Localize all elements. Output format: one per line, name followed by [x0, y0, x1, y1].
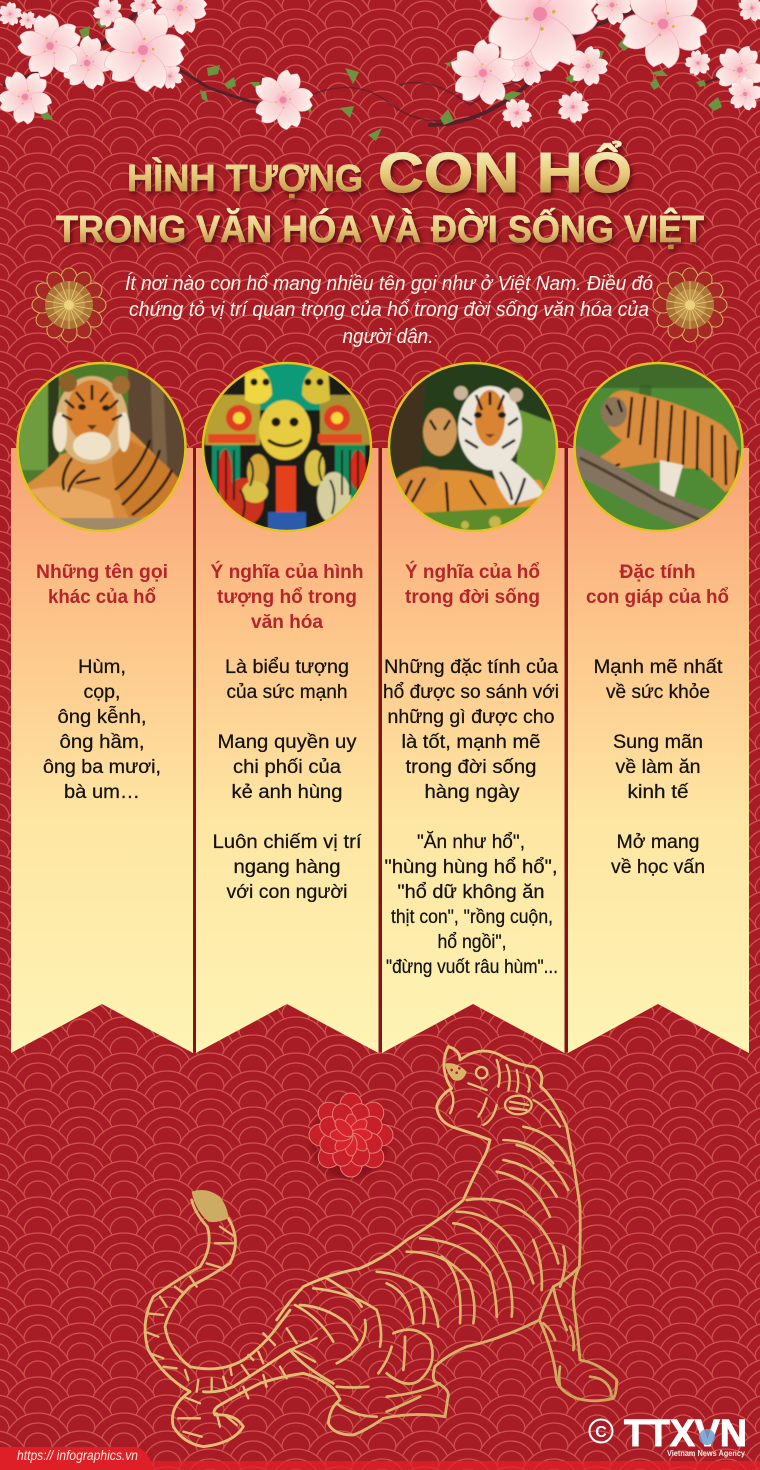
globe [699, 1429, 715, 1445]
body text: của sức mạnh [226, 681, 348, 703]
body text: Luôn chiếm vị trí [212, 831, 362, 853]
body text: hổ ngồi", [438, 931, 506, 953]
heading: trong đời sống [405, 587, 540, 608]
heading: khác của hổ [48, 587, 156, 608]
body text: ngang hàng [234, 856, 340, 878]
copyright symbol [590, 1420, 612, 1442]
body text: Mạnh mẽ nhất [594, 656, 723, 678]
intro paragraph: người dân. [342, 326, 434, 348]
body text: ông ba mươi, [43, 756, 161, 778]
heading: con giáp của hổ [586, 587, 729, 608]
body text: Những đặc tính của [384, 656, 558, 678]
body text [383, 656, 559, 978]
tiger tail and leg ticks [145, 1227, 317, 1437]
photo: tiger with cub [385, 360, 560, 535]
body text: "hùng hùng hổ hổ", [384, 856, 558, 878]
icon: right gold medallion [653, 268, 727, 342]
body text: Hùm, [78, 656, 126, 678]
body text: bà um… [64, 781, 140, 803]
body text: Sung mãn [613, 731, 703, 753]
heading [210, 561, 364, 633]
column gap lines [192, 448, 568, 1052]
panel: meaning in culture [196, 448, 378, 1053]
body text: hàng ngày [424, 781, 520, 803]
intro paragraph [125, 272, 653, 348]
body text: "hổ dữ không ăn [398, 881, 544, 903]
blossom branches: top left [0, 0, 450, 140]
body text: chi phối của [233, 756, 341, 778]
body text [594, 656, 723, 878]
icon: red flower [309, 1093, 393, 1179]
body text: với con người [226, 881, 348, 903]
intro paragraph: chứng tỏ vị trí quan trọng của hổ trong đời sống văn hóa của [129, 299, 649, 321]
icon: left gold medallion [32, 268, 106, 342]
heading: Ý nghĩa của hình [210, 561, 364, 583]
title [56, 140, 704, 251]
copyright symbol: C [595, 1424, 607, 1441]
panel: names of the tiger [11, 448, 193, 1053]
heading: Ý nghĩa của hổ [405, 561, 540, 583]
heading [405, 561, 540, 608]
body text: trong đời sống [406, 756, 536, 778]
title line 1 small: HÌNH TƯỢNG [127, 156, 363, 200]
body text: Là biểu tượng [225, 656, 349, 678]
body text: thịt con", "rồng cuộn, [391, 906, 553, 928]
body text: kinh tế [628, 781, 689, 803]
body text: ông kễnh, [58, 705, 146, 728]
body text: ông hầm, [60, 731, 144, 753]
TTXVN wordmark: TTXVN [624, 1413, 747, 1455]
body text [212, 656, 362, 903]
tiger outer outline [145, 1047, 617, 1447]
body text: cọp, [84, 681, 120, 703]
heading: văn hóa [251, 612, 323, 633]
title line 2: TRONG VĂN HÓA VÀ ĐỜI SỐNG VIỆT [56, 206, 704, 251]
body text [43, 656, 161, 803]
heading: Đặc tính [620, 562, 696, 583]
body text: kẻ anh hùng [232, 781, 342, 803]
footer ribbon with url: https:// infographics.vn [17, 1448, 138, 1463]
photo: tiger on a log [570, 360, 745, 537]
panel: zodiac traits [568, 448, 749, 1053]
tiger head details [450, 1060, 560, 1163]
title line 1 large: CON HỔ [378, 140, 632, 205]
body text: "đừng vuốt râu hùm"... [386, 956, 558, 978]
body text: về làm ăn [616, 756, 700, 778]
blossom branches: top right [368, 0, 760, 141]
bottom bright red band [0, 1461, 760, 1470]
body text: về học vấn [611, 856, 705, 878]
photo: seated tiger [15, 360, 190, 535]
heading: tượng hổ trong [217, 587, 357, 608]
tiger nose [445, 1063, 467, 1081]
body text: Mang quyền uy [218, 731, 357, 753]
footer ribbon with url [0, 1447, 153, 1470]
heading [586, 562, 729, 608]
agency caption: Vietnam News Agency [667, 1448, 745, 1458]
intro paragraph: Ít nơi nào con hổ mang nhiều tên gọi như ở Việt Nam. Điều đó [125, 272, 653, 295]
body text: là tốt, mạnh mẽ [402, 731, 540, 753]
tiger stripes [295, 1127, 612, 1417]
logo: TTXVN copyright [590, 1413, 747, 1458]
photo: folk painting of tigers [200, 360, 375, 535]
heading: Những tên gọi [36, 562, 168, 583]
body text: Mở mang [616, 831, 700, 853]
gold tiger line art [145, 1047, 617, 1447]
body text: hổ được so sánh với [383, 681, 559, 703]
panel: meaning in daily life [382, 448, 564, 1053]
heading [36, 562, 168, 608]
tiger tail tip [192, 1190, 228, 1222]
body text: về sức khỏe [606, 681, 710, 703]
body text: những gì được cho [388, 706, 555, 728]
body text: "Ăn như hổ", [417, 830, 525, 853]
